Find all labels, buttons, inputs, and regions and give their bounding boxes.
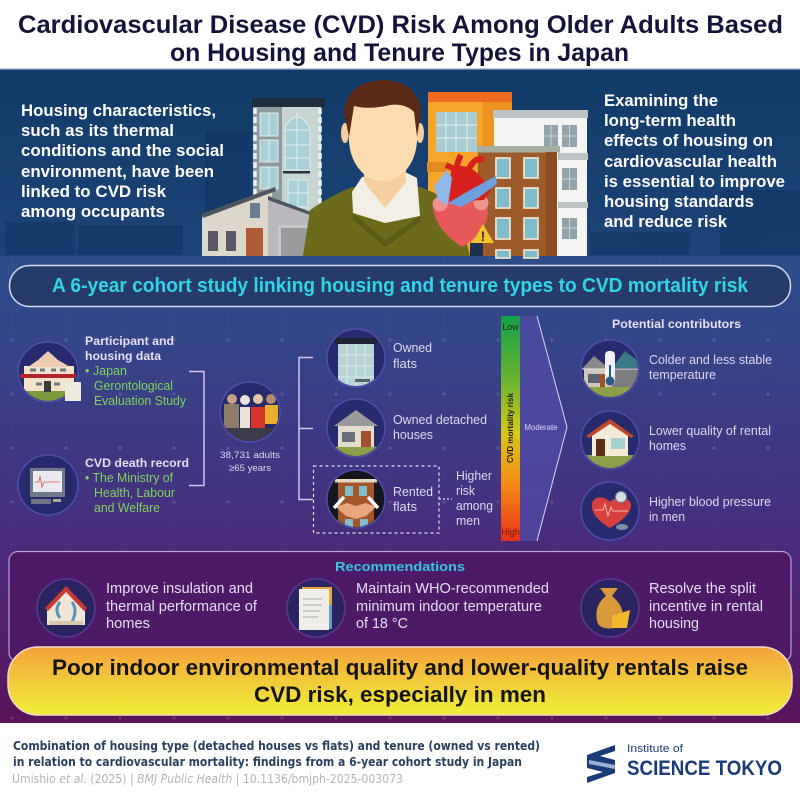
text: moderate: Moderate [524,423,558,432]
illustration: heart [432,155,497,247]
text: higher risk among men: Higher [456,469,492,483]
text: WHO temperature: Maintain WHO-recommended [356,581,549,597]
banner: study heading [10,266,790,306]
text: colder temperature [649,353,772,382]
icon: rented flats handshake [327,470,385,528]
icon: owned detached house [327,399,385,458]
hero text: right: housing standards [604,192,754,211]
logo: Institute of Science Tokyo: SCIENCE TOKYO [627,756,782,780]
panel: study section background [0,255,800,723]
text: cohort size: ≥65 years [229,463,271,474]
icon: document [287,579,345,637]
hero text: left: such as its thermal [21,121,174,140]
text: cohort size [220,450,280,474]
illustration: detached house [201,187,311,256]
dashed highlight: rented flats [314,466,439,533]
hero text: right: Examining the [604,91,718,110]
text: owned flats: Owned [393,341,432,355]
text: rented flats: Rented [393,485,433,499]
hero text: right: effects of housing on [604,131,773,150]
text: higher risk among men: men [456,514,480,528]
text: participant and housing data: • Japan [85,364,127,378]
icon: money bag [581,579,639,637]
text: participant and housing data: Gerontological [94,379,173,393]
banner: study heading: A 6-year cohort study linking housing and tenure types to CVD mortality risk [52,274,749,297]
dashed connector: rented flats to higher risk note [439,498,452,500]
text: split incentive: housing [649,616,699,632]
panel: hero background [0,69,800,256]
logo: Institute of Science Tokyo: Institute of [627,743,684,755]
text: CVD death record: CVD death record [85,456,189,470]
text: lower quality rentals [649,424,771,453]
text: owned detached houses [393,413,487,442]
text: participant and housing data: housing data [85,349,161,363]
footer: citation: Combination of housing type (detached houses vs flats) and tenure (owned vs rented) [13,738,540,753]
icon: warning triangle: ! [481,228,485,244]
hero text: right: long-term health [604,111,736,130]
chart: CVD mortality risk scale [501,316,520,541]
text: CVD death record: • The Ministry of [85,471,174,485]
title [18,11,783,67]
text: WHO temperature: of 18 °C [356,616,408,632]
text: rented flats [393,485,433,514]
text: CVD death record [85,456,189,515]
text: WHO temperature [356,581,549,632]
callout: key message: Poor indoor environmental quality and lower-quality rentals raise [52,655,748,680]
text: participant and housing data [85,334,187,408]
icon: ECG monitor [18,455,78,515]
chart: CVD mortality risk scale: Low [502,322,519,332]
text: colder temperature: Colder and less stable [649,353,772,367]
callout: key message [8,647,792,715]
illustration: man [303,80,470,256]
text: owned detached houses: houses [393,428,433,442]
text: rented flats: flats [393,500,417,514]
icon: insulated home [37,579,95,637]
text: CVD death record: Health, Labour [94,486,175,500]
hero text: left: Housing characteristics, [21,101,216,120]
text: insulation: Improve insulation and [106,581,253,597]
icon: heart with blood pressure gauge [581,482,639,540]
hero text: left: among occupants [21,202,165,221]
footer: citation: in relation to cardiovascular mortality: findings from a 6-year cohort study in Japan [13,754,522,769]
text: colder temperature: temperature [649,368,716,382]
text: higher risk among men: among [456,499,493,513]
footer: citation [12,738,540,786]
hero text: left: conditions and the social [21,141,224,160]
hero text: left: linked to CVD risk [21,182,167,201]
footer: citation: Umishio et al. (2025) | BMJ Public Health | 10.1136/bmjph-2025-003073 [12,771,403,786]
hero text: right [604,91,785,231]
chevron arrow: risk to contributors [520,316,567,541]
text: participant and housing data: Participant and [85,334,174,348]
bracket: cohort to housing types [299,358,313,500]
text: lower quality rentals: Lower quality of rental [649,424,771,438]
title: Cardiovascular Disease (CVD) Risk Among Older Adults Based [18,11,783,39]
text: higher risk among men: risk [456,484,476,498]
text: owned detached houses: Owned detached [393,413,487,427]
text: cohort size: 38,731 adults [220,450,280,461]
text: insulation: homes [106,616,150,632]
text: insulation [106,581,258,632]
text: split incentive [649,581,763,632]
text: owned flats [393,341,432,371]
text: higher risk among men [456,469,493,528]
hero text: left: environment, have been [21,162,214,181]
text: higher blood pressure [649,495,771,524]
chart: CVD mortality risk scale: CVD mortality risk [506,392,515,463]
illustration: orange, white and brick buildings [427,92,588,258]
text: split incentive: incentive in rental [649,599,763,615]
logo: Institute of Science Tokyo [587,743,782,783]
icon: house with document [18,342,81,407]
text: owned flats: flats [393,357,417,371]
text: split incentive: Resolve the split [649,581,756,597]
panel: recommendations [9,552,791,662]
text: participant and housing data: Evaluation Study [94,394,187,408]
text: lower quality rentals: homes [649,439,686,453]
text: higher blood pressure: in men [649,510,685,524]
chart: CVD mortality risk scale: High [501,527,520,537]
hero text: right: is essential to improve [604,172,785,191]
hero text: left [21,101,224,221]
hero text: right: cardiovascular health [604,152,777,171]
text: CVD death record: and Welfare [94,501,160,515]
text: insulation: thermal performance of [106,599,258,615]
bracket: data sources to cohort [189,372,204,486]
icon: rental home [581,411,639,469]
callout: key message: CVD risk, especially in men [254,682,546,707]
icon: group of older adults [220,382,280,444]
text: WHO temperature: minimum indoor temperature [356,599,542,615]
illustration: tall grey building [252,98,325,215]
icon: house with thermometer [581,340,640,398]
hero text: right: and reduce risk [604,212,728,231]
heading: potential contributors: Potential contributors [612,319,741,331]
text: higher blood pressure: Higher blood pressure [649,495,771,509]
title: on Housing and Tenure Types in Japan [170,39,629,67]
icon: warning triangle [470,224,494,256]
heading: recommendations: Recommendations [335,559,465,574]
icon: owned flats [327,329,385,388]
